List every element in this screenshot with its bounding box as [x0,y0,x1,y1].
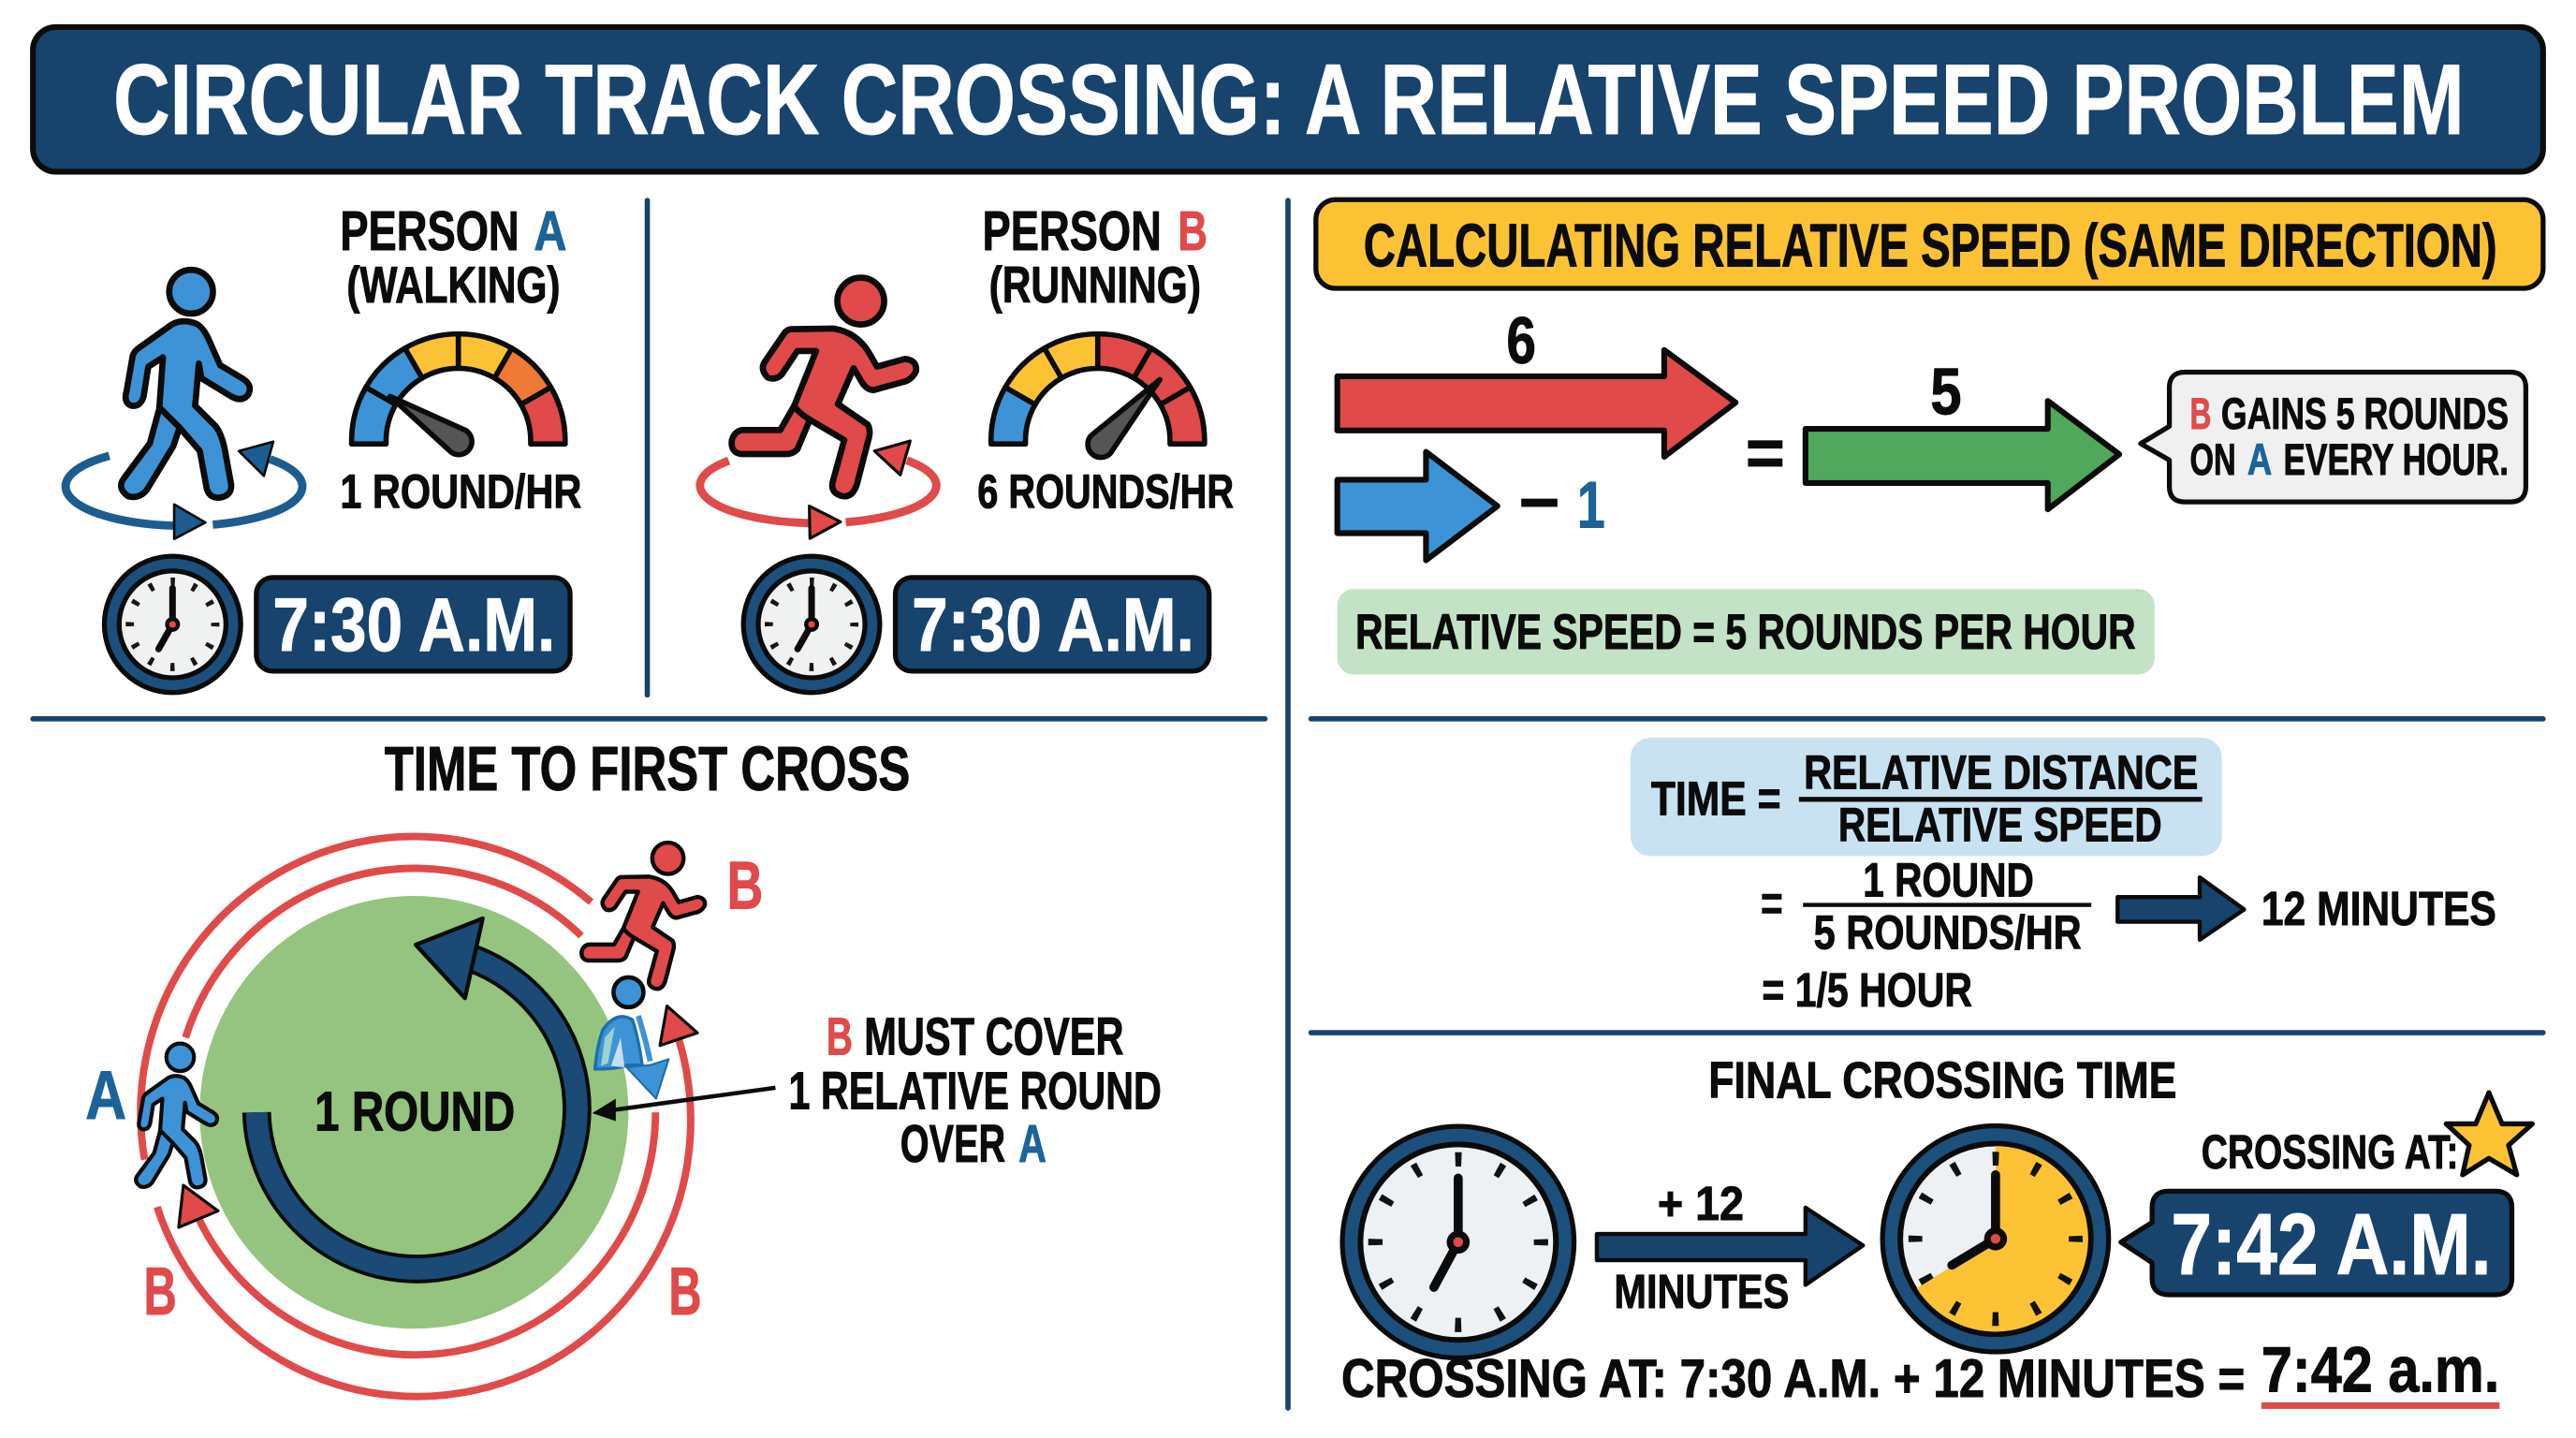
panel: relative speed [1316,199,2543,674]
labels: B: B [668,1255,701,1329]
label: 1 round: 1 ROUND [315,1079,515,1142]
summary line: 7:42 a.m. [2261,1334,2499,1406]
formula box: RELATIVE DISTANCE [1804,745,2198,799]
heading: person A: PERSON [340,199,520,262]
panel: final crossing time [1341,1051,2532,1409]
label: A: A [85,1056,126,1134]
panel: person B running [700,199,1234,693]
heading: person A: A [534,199,567,262]
summary line: CROSSING AT: 7:30 A.M. + 12 MINUTES = [1341,1349,2245,1409]
result: 1/5 hour: = 1/5 HOUR [1762,963,1972,1017]
heading: person B: PERSON [983,199,1162,262]
speed label: 1 ROUND/HR [340,464,581,518]
heading: TIME TO FIRST CROSS [385,735,910,804]
result box: relative speed [1338,589,2155,674]
labels: B [144,849,763,1329]
heading: person B: (RUNNING) [989,257,1201,314]
diagram: circular track [85,836,763,1397]
figure: A ghost at crossing point [595,977,668,1099]
heading: person B [983,199,1208,314]
callout: B gains 5 rounds [2141,373,2525,502]
label: crossing at: CROSSING AT: [2202,1125,2458,1179]
equals sign [1748,440,1782,466]
callout: B gains 5 rounds: ON [2190,435,2236,485]
figure: B runner [581,843,705,989]
icon: start clock 7:30 [1342,1126,1574,1358]
callout text: B [827,1007,853,1066]
callout text: OVER [900,1114,1005,1173]
panel: person A walking [66,199,581,693]
formula box: TIME = [1651,771,1781,825]
result badge: 7:42: 7:42 A.M. [2171,1196,2492,1293]
icon: walking figure on circular path [66,270,302,539]
icon: clock 7:30 [743,556,880,693]
arrow: plus 12 minutes: + 12 [1658,1177,1744,1230]
callout text [788,1007,1162,1173]
panel: time to first cross [85,735,1162,1397]
arrow: plus 12 minutes [1597,1177,1863,1318]
icon: star [2446,1093,2532,1175]
arrow: one round [256,918,577,1269]
heading: person A [340,199,567,314]
icon: end clock 7:42 [1882,1126,2109,1352]
heading: FINAL CROSSING TIME [1708,1051,2176,1108]
time badge: 7:30 A.M. [272,583,555,668]
arrow: A speed 1 [1338,452,1605,560]
arrow: pointer to the circle [593,1088,775,1121]
formula substitution: 1 ROUND [1863,853,2034,906]
formula box: RELATIVE SPEED [1838,799,2162,852]
labels: B: B [144,1255,177,1329]
icon: clock 7:30 [105,556,241,693]
heading: person A: (WALKING) [346,257,561,314]
arrow: B speed 6 [1338,303,1735,457]
panel: time formula [1631,738,2496,1017]
formula box [1631,738,2222,856]
gauge: speed high [991,334,1205,458]
formula substitution: 5 ROUNDS/HR [1814,906,2082,960]
result: 12 minutes: 12 MINUTES [2261,882,2496,935]
track arrowheads [179,1006,697,1227]
callout text: 1 RELATIVE ROUND [788,1062,1162,1121]
formula substitution [1762,853,2091,960]
arrow: to 12 minutes [2117,877,2244,940]
arrow: B speed 6: 6 [1506,303,1536,377]
time badge: 7:30 A.M. [912,583,1194,668]
gauge: speed low [352,334,565,455]
result box: relative speed: RELATIVE SPEED = 5 ROUNDS PER HOUR [1355,605,2136,660]
arrow: relative speed 5 [1806,354,2119,509]
arrow: A speed 1: 1 [1577,467,1605,541]
callout: B gains 5 rounds: A [2247,435,2272,485]
heading: person B: B [1178,199,1208,262]
callout text: MUST COVER [864,1007,1123,1066]
callout: B gains 5 rounds: B [2190,389,2211,439]
speed label: 6 ROUNDS/HR [977,464,1234,518]
figure: A walker [136,1044,217,1187]
arrow: plus 12 minutes: MINUTES [1614,1265,1789,1318]
labels: B: B [727,849,763,924]
arrow: relative speed 5: 5 [1930,354,1962,428]
icon: running figure on circular path [700,278,936,538]
callout text: A [1018,1114,1046,1173]
